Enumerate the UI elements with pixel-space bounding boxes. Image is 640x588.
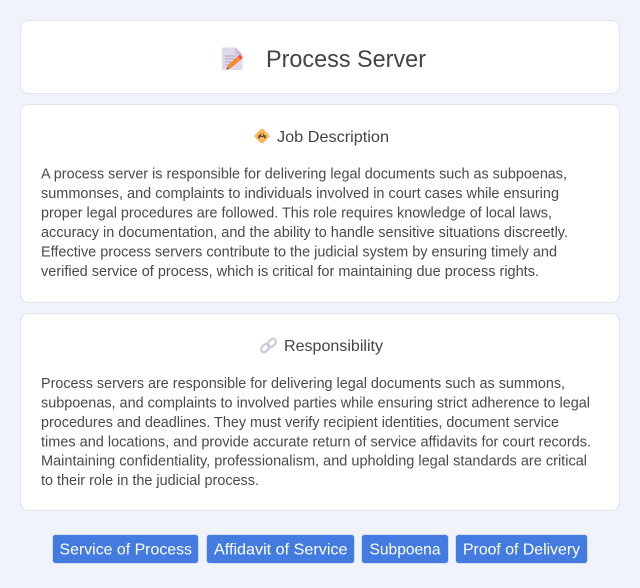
tag: Affidavit of Service: Affidavit of Service xyxy=(214,542,348,558)
heading: Job Description: Job Description xyxy=(277,129,389,146)
text block: job description body: proper legal procedures are followed. This role requires knowledge of local laws, xyxy=(41,206,552,222)
heading: Responsibility: Responsibility xyxy=(284,338,383,355)
tag: Subpoena xyxy=(362,534,448,564)
text block: responsibility body: subpoenas, and complaints to involved parties while ensuring strict adherence to legal xyxy=(41,396,590,412)
panel: responsibility xyxy=(20,314,620,510)
panel: title header xyxy=(20,20,620,94)
icon: orange diamond sign xyxy=(254,128,270,144)
tag: Service of Process: Service of Process xyxy=(60,542,192,558)
icon: link xyxy=(260,338,277,353)
text block: responsibility body xyxy=(41,376,591,489)
text block: job description body: summonses, and complaints to individuals involved in court cases while ensuring xyxy=(41,186,559,202)
icon: document with pencil xyxy=(222,48,243,70)
text block: responsibility body: to their role in the judicial process. xyxy=(41,473,259,489)
text block: responsibility body: Process servers are responsible for delivering legal documents such as summons, xyxy=(41,376,565,392)
text block: responsibility body: Maintaining confidentiality, professionalism, and upholding legal standards are critical xyxy=(41,454,587,470)
panel: job description xyxy=(20,104,620,302)
text block: responsibility body: procedures and deadlines. They must verify recipient identities, document service xyxy=(41,415,559,431)
text block: job description body xyxy=(41,166,568,280)
heading: Process Server: Process Server xyxy=(266,46,426,73)
text block: job description body: Effective process servers contribute to the judicial system by ensuring timely and xyxy=(41,244,557,260)
text block: job description body: verified service of process, which is critical for maintaining due process rights. xyxy=(41,264,539,280)
tag: Service of Process xyxy=(52,534,198,564)
tag: Proof of Delivery xyxy=(456,534,588,564)
tag: Subpoena: Subpoena xyxy=(370,542,441,558)
tag: Affidavit of Service xyxy=(206,534,354,564)
text block: job description body: A process server is responsible for delivering legal documents such as subpoenas, xyxy=(41,166,567,182)
text block: job description body: accuracy in documentation, and the ability to handle sensitive situations discreetly. xyxy=(41,225,568,241)
tag: Proof of Delivery: Proof of Delivery xyxy=(463,542,580,558)
text block: responsibility body: times and locations, and provide accurate return of service affidavits for court records. xyxy=(41,434,591,450)
